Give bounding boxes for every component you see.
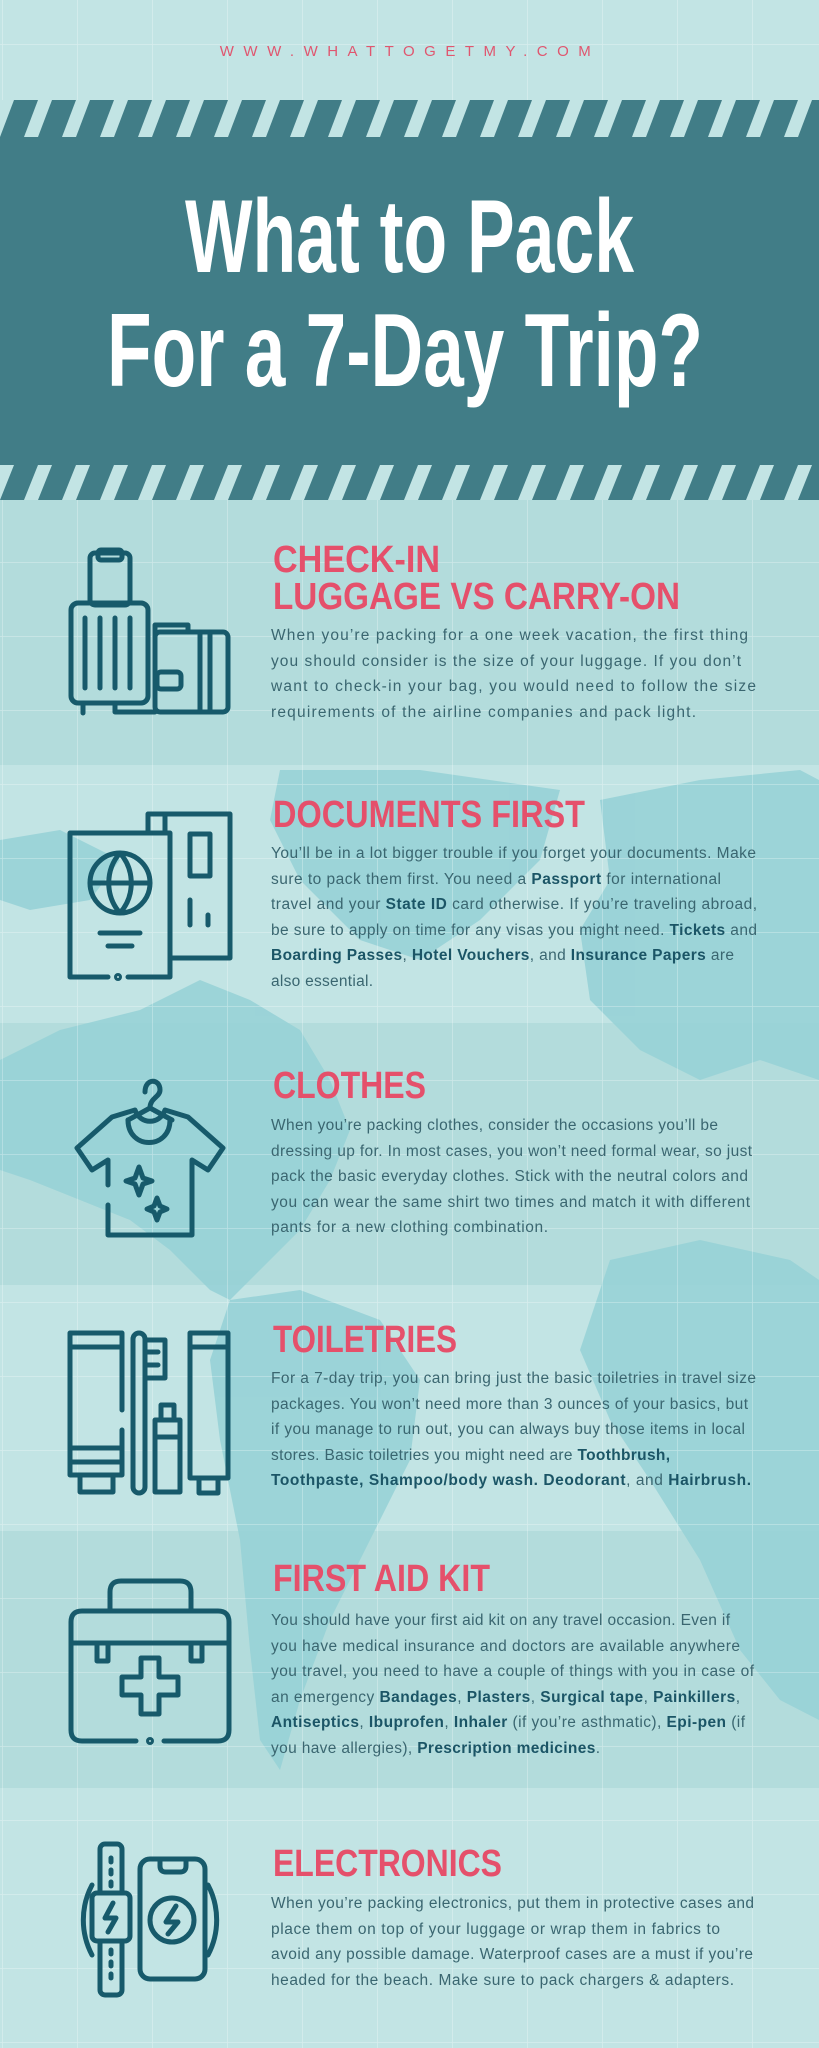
body text xyxy=(271,1612,755,1757)
icon: shirt on hanger xyxy=(77,1081,223,1235)
body text: stores. Basic toiletries you might need are Toothbrush, xyxy=(271,1447,670,1464)
section: electronics xyxy=(83,1843,754,1995)
body text: When you’re packing clothes, consider the occasions you’ll be xyxy=(271,1117,718,1134)
heading: CLOTHES xyxy=(273,1065,426,1107)
body text: Boarding Passes, Hotel Vouchers, and Insurance Papers are xyxy=(271,947,734,964)
icon: first aid kit xyxy=(71,1581,229,1742)
section: clothes xyxy=(77,1065,753,1236)
body text: an emergency Bandages, Plasters, Surgical tape, Painkillers, xyxy=(271,1689,740,1706)
body text: avoid any possible damage. Waterproof cases are a must if you’re xyxy=(271,1946,753,1963)
title xyxy=(107,179,703,409)
body text: When you’re packing electronics, put them in protective cases and xyxy=(271,1895,754,1912)
body text: You’ll be in a lot bigger trouble if you forget your documents. Make xyxy=(271,845,756,862)
world map silhouettes xyxy=(0,770,819,1770)
body text xyxy=(271,1895,754,1989)
body text: also essential. xyxy=(271,973,373,990)
title: What to Pack xyxy=(185,179,634,295)
body text: Antiseptics, Ibuprofen, Inhaler (if you’re asthmatic), Epi-pen (if xyxy=(271,1714,746,1731)
body text: if you manage to run out, you can always buy those items in local xyxy=(271,1421,745,1438)
body text: Toothpaste, Shampoo/body wash. Deodorant, and Hairbrush. xyxy=(271,1472,751,1489)
body text: pack the basic everyday clothes. Stick with the neutral colors and xyxy=(271,1168,748,1185)
icon: luggage xyxy=(71,550,228,713)
website url: WWW.WHATTOGETMY.COM xyxy=(220,43,600,60)
body text: you have medical insurance and doctors are available anywhere xyxy=(271,1638,740,1655)
body text: dressing up for. In most cases, you won’t need formal wear, so just xyxy=(271,1143,753,1160)
body text: headed for the beach. Make sure to pack chargers & adapters. xyxy=(271,1972,734,1989)
body text: sure to pack them first. You need a Passport for international xyxy=(271,871,721,888)
body text: packages. You won’t need more than 3 ounces of your basics, but xyxy=(271,1396,749,1413)
body text: place them on top of your luggage or wrap them in fabrics to xyxy=(271,1921,720,1938)
icon: watch and phone on charger xyxy=(83,1844,217,1995)
body text: requirements of the airline companies and pack light. xyxy=(271,704,696,721)
body text: travel and your State ID card otherwise. If you’re traveling abroad, xyxy=(271,896,757,913)
body text: pants for a new clothing combination. xyxy=(271,1219,548,1236)
section: check-in luggage: LUGGAGE VS CARRY-ON xyxy=(273,576,680,618)
section: toiletries xyxy=(70,1319,756,1493)
header banner xyxy=(0,100,819,500)
body text: want to check-in your bag, you would need to follow the size xyxy=(270,678,756,695)
body text: For a 7-day trip, you can bring just the basic toiletries in travel size xyxy=(271,1370,756,1387)
body text: you should consider is the size of your luggage. If you don’t xyxy=(271,653,742,670)
body text xyxy=(271,1117,753,1236)
icon: passport xyxy=(70,814,230,978)
body text: you travel, you need to have a couple of things with you in case of xyxy=(271,1663,755,1680)
section: first aid xyxy=(71,1558,755,1757)
section: documents xyxy=(70,794,757,990)
body text: you can wear the same shirt two times and match it with different xyxy=(271,1194,751,1211)
heading: TOILETRIES xyxy=(273,1319,457,1361)
heading: FIRST AID KIT xyxy=(273,1558,490,1600)
body text xyxy=(270,627,756,721)
heading: CHECK-IN xyxy=(273,539,440,581)
body text: be sure to apply on time for any visas you might need. Tickets and xyxy=(271,922,757,939)
body text: When you’re packing for a one week vacation, the first thing xyxy=(271,627,748,644)
body text: You should have your first aid kit on any travel occasion. Even if xyxy=(271,1612,731,1629)
section: check-in luggage xyxy=(71,539,756,721)
icon: toiletries xyxy=(70,1333,228,1493)
body text xyxy=(271,1370,756,1489)
body text xyxy=(271,845,757,990)
heading: DOCUMENTS FIRST xyxy=(273,794,585,836)
heading: ELECTRONICS xyxy=(273,1843,502,1885)
body text: you have allergies), Prescription medicines. xyxy=(271,1740,600,1757)
